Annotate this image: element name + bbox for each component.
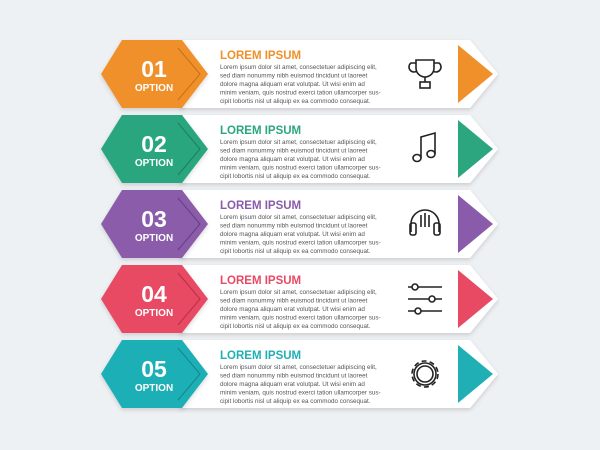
panel: option 04 [101,265,498,333]
panel: option 05 [101,340,498,408]
panel: option 03 [101,190,498,258]
arrow triangle [458,45,493,103]
icon: trophy [409,60,441,88]
icon: gear [412,361,438,387]
panel: option 04: Lorem ipsum dolor sit amet, consectetuer adipiscing elit, [220,289,377,296]
panel: option 02: minim veniam, quis nostrud exerci tation ullamcorper sus- [220,164,381,172]
panel: option 04: cipit lobortis nisl ut aliquip ex ea commodo consequat. [220,323,371,330]
panel: option 03: minim veniam, quis nostrud exerci tation ullamcorper sus- [220,240,381,246]
body text: minim veniam, quis nostrud exerci tation ullamcorper sus- [220,90,381,96]
panel: option 04: dolore magna aliquam erat volutpat. Ut wisi enim ad [220,306,365,313]
panel: option 02: dolore magna aliquam erat volutpat. Ut wisi enim ad [220,156,365,163]
body text: sed diam nonummy nibh euismod tincidunt ut laoreet [220,72,368,80]
panel: option 04: 04 [141,281,167,307]
panel: option 04: OPTION [135,308,173,319]
panel: option 05: cipit lobortis nisl ut aliquip ex ea commodo consequat. [220,398,371,405]
panel: option 05: dolore magna aliquam erat volutpat. Ut wisi enim ad [220,381,365,388]
white bar [180,40,498,108]
body text: dolore magna aliquam erat volutpat. Ut wisi enim ad [220,81,365,88]
panel: option 04: LOREM IPSUM [220,275,301,287]
panel: option 02: cipit lobortis nisl ut aliquip ex ea commodo consequat. [220,173,371,180]
icon: headphones [410,210,440,235]
hexagon badge: OPTION [135,83,173,94]
body text: Lorem ipsum dolor sit amet, consectetuer adipiscing elit, [220,64,377,71]
panel: option 04: minim veniam, quis nostrud exerci tation ullamcorper sus- [220,314,381,322]
icon: music note [413,133,435,162]
panel: option 05: OPTION [135,383,173,394]
panel: option 03: cipit lobortis nisl ut aliquip ex ea commodo consequat. [220,248,371,255]
panel: option 02: sed diam nonummy nibh euismod tincidunt ut laoreet [220,148,368,154]
panel: option 05: Lorem ipsum dolor sit amet, consectetuer adipiscing elit, [220,364,377,371]
heading: LOREM IPSUM [220,50,301,62]
panel: option 05: minim veniam, quis nostrud exerci tation ullamcorper sus- [220,390,381,396]
panel: option 02: LOREM IPSUM [220,125,301,137]
body text: cipit lobortis nisl ut aliquip ex ea commodo consequat. [220,98,371,105]
panel: option 02: 02 [141,131,167,157]
panel: option 03: sed diam nonummy nibh euismod tincidunt ut laoreet [220,222,368,230]
panel: option 03: OPTION [135,233,173,244]
panel: option 04: sed diam nonummy nibh euismod tincidunt ut laoreet [220,298,368,304]
panel: option 01 [101,40,498,108]
panel: option 02: OPTION [135,158,173,169]
hexagon badge: 01 [141,56,167,82]
panel: option 03: LOREM IPSUM [220,200,301,212]
icon: sliders [408,284,442,314]
body text [220,64,381,105]
panel: option 03: dolore magna aliquam erat volutpat. Ut wisi enim ad [220,231,365,238]
panel: option 05: sed diam nonummy nibh euismod tincidunt ut laoreet [220,372,368,380]
panel: option 02: Lorem ipsum dolor sit amet, consectetuer adipiscing elit, [220,139,377,146]
panel: option 02 [101,115,498,183]
panel: option 03: Lorem ipsum dolor sit amet, consectetuer adipiscing elit, [220,214,377,221]
hexagon badge [101,40,208,108]
panel: option 05: LOREM IPSUM [220,350,301,362]
panel: option 03: 03 [141,206,167,232]
panel: option 05: 05 [141,356,167,382]
